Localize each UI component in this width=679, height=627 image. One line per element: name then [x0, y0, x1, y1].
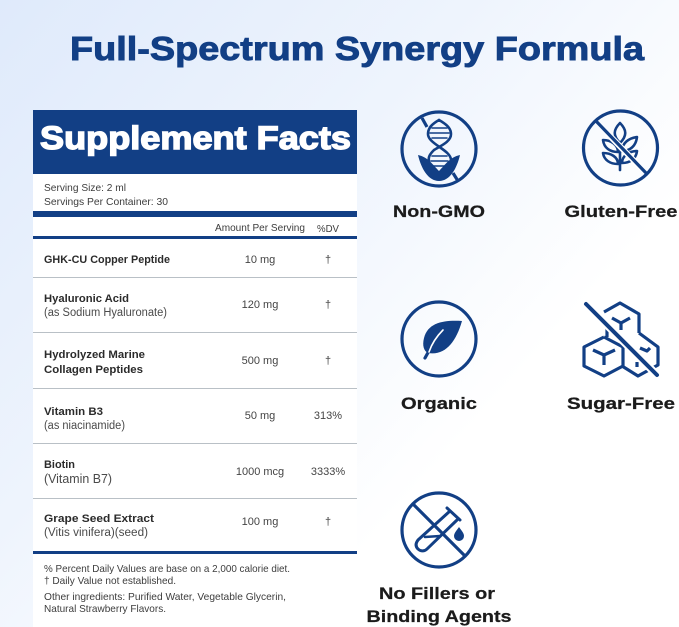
row: Biotin: 1000 mcg	[236, 466, 284, 478]
row: Biotin: Biotin	[44, 459, 75, 471]
label: no fillers: Binding Agents	[366, 607, 512, 626]
icon: no fillers	[402, 493, 476, 567]
icon: gluten-free	[584, 111, 658, 185]
icon: sugar-free	[584, 303, 658, 376]
row: Biotin	[44, 459, 345, 486]
row: Hyaluronic Acid: †	[325, 299, 331, 311]
label: gluten-free: Gluten-Free	[564, 202, 678, 221]
label: no fillers: No Fillers or	[379, 584, 495, 603]
row: GHK-CU: GHK-CU Copper Peptide	[44, 254, 170, 266]
row: Grape Seed: †	[325, 516, 331, 528]
row: Vitamin B3: 50 mg	[245, 410, 275, 422]
row: Biotin: 3333%	[311, 466, 345, 478]
row: Vitamin B3: (as niacinamide)	[44, 420, 125, 432]
column headings: %DV	[317, 223, 339, 235]
row: Marine Collagen: Collagen Peptides	[44, 364, 143, 376]
row: Hyaluronic Acid: 120 mg	[242, 299, 278, 311]
icon: non-GMO	[402, 112, 476, 186]
footnotes	[44, 563, 290, 615]
column headings: Amount Per Serving	[215, 222, 305, 234]
serving info	[44, 182, 168, 208]
footnotes: Other ingredients: Purified Water, Vegetable Glycerin,	[44, 591, 286, 603]
row: Vitamin B3: 313%	[314, 410, 342, 422]
row: Grape Seed: (Vitis vinifera)(seed)	[44, 527, 148, 539]
row: Vitamin B3: Vitamin B3	[44, 406, 103, 418]
footnotes: † Daily Value not established.	[44, 575, 176, 587]
footnotes: % Percent Daily Values are base on a 2,000 calorie diet.	[44, 563, 290, 575]
title: Full-Spectrum Synergy Formula	[70, 30, 645, 67]
row: Vitamin B3	[44, 406, 342, 432]
label: non-GMO: Non-GMO	[393, 202, 485, 221]
row: Marine Collagen: 500 mg	[242, 355, 278, 367]
row: Grape Seed: Grape Seed Extract	[44, 513, 154, 525]
facts header	[33, 110, 357, 174]
label: no fillers	[366, 584, 512, 626]
row: Marine Collagen: †	[325, 355, 331, 367]
label: organic: Organic	[401, 394, 477, 413]
serving info: Servings Per Container: 30	[44, 196, 168, 208]
row: Hyaluronic Acid: (as Sodium Hyaluronate)	[44, 307, 167, 319]
row: Marine Collagen: Hydrolyzed Marine	[44, 349, 145, 361]
row: Marine Collagen	[44, 349, 331, 376]
icon: organic	[402, 302, 476, 376]
label: sugar-free: Sugar-Free	[567, 394, 675, 413]
panel: supplement facts	[33, 110, 357, 627]
facts header: Supplement Facts	[40, 120, 351, 156]
serving info: Serving Size: 2 ml	[44, 182, 126, 194]
row: GHK-CU: †	[325, 254, 331, 266]
row: Hyaluronic Acid: Hyaluronic Acid	[44, 293, 129, 305]
row: Grape Seed: 100 mg	[242, 516, 278, 528]
row: GHK-CU: 10 mg	[245, 254, 275, 266]
footnotes: Natural Strawberry Flavors.	[44, 603, 166, 615]
row: GHK-CU	[44, 254, 331, 266]
column headings	[215, 222, 339, 235]
row: Biotin: (Vitamin B7)	[44, 472, 112, 486]
row: Grape Seed	[44, 513, 331, 539]
row: Hyaluronic Acid	[44, 293, 331, 319]
